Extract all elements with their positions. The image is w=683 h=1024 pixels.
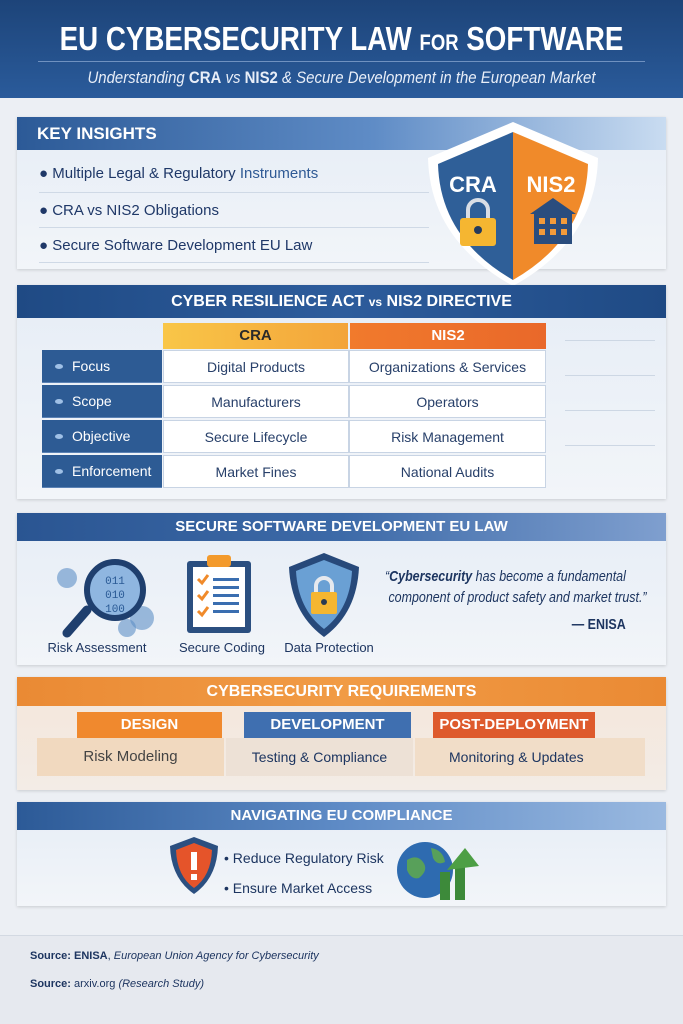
row: scope: Manufacturers: [211, 394, 301, 410]
heading: key insights: [17, 117, 666, 150]
icon: CRA NIS2 shield: [428, 122, 598, 285]
icon: shield lock: [289, 553, 359, 637]
row: enforcement: Enforcement: [72, 463, 151, 479]
label: secure coding: Secure Coding: [179, 640, 265, 655]
icon: magnifier: 010: [105, 590, 125, 602]
row: enforcement: [42, 455, 546, 488]
stage: development: Testing & Compliance: [252, 749, 387, 765]
heading: requirements: CYBERSECURITY REQUIREMENTS: [207, 683, 476, 700]
icon: magnifier: 100: [105, 604, 125, 616]
icon: globe with growth arrow: [397, 842, 479, 900]
panel: secure software development: [17, 513, 666, 665]
label: data protection: Data Protection: [284, 640, 374, 655]
heading: navigating: [17, 802, 666, 830]
row: focus: Focus: [72, 358, 110, 374]
icon: clipboard: [187, 555, 251, 633]
row: scope: Operators: [416, 394, 479, 410]
footer: sources: Source: ENISA, European Union Agency for Cybersecurity: [30, 950, 319, 962]
heading: key insights: KEY INSIGHTS: [37, 124, 157, 143]
compliance benefits list: • Reduce Regulatory Risk: [224, 850, 384, 866]
icon: CRA NIS2 shield: NIS2: [527, 172, 575, 197]
panel: cybersecurity requirements: [17, 677, 666, 790]
stage: design: Risk Modeling: [83, 748, 178, 765]
row: focus: Digital Products: [207, 359, 305, 375]
title: EU CYBERSECURITY LAW FOR SOFTWARE: [60, 20, 623, 57]
stage: design: [37, 712, 224, 776]
stage: post-deployment: [415, 712, 645, 776]
quote: component of product safety and market trust.”: [388, 589, 647, 606]
row: focus: Organizations & Services: [369, 359, 526, 375]
compliance benefits list: • Ensure Market Access: [224, 880, 372, 896]
row: focus: [42, 350, 546, 383]
stage: development: DEVELOPMENT: [270, 716, 385, 733]
column header: CRA: CRA: [239, 327, 272, 344]
row: objective: Objective: [72, 428, 130, 444]
row: enforcement: National Audits: [401, 464, 494, 480]
quote: “Cybersecurity has become a fundamental: [385, 568, 626, 585]
column header: NIS2: NIS2: [431, 327, 465, 344]
heading: comparison: CYBER RESILIENCE ACT vs NIS2 DIRECTIVE: [171, 293, 512, 310]
icon: CRA NIS2 shield: CRA: [449, 172, 497, 197]
header banner: [0, 0, 683, 98]
row: enforcement: Market Fines: [216, 464, 296, 480]
bullet list: ● Multiple Legal & Regulatory Instruments: [39, 165, 318, 182]
bullet list: ● Secure Software Development EU Law: [39, 237, 312, 254]
panel: navigating EU compliance: [17, 802, 666, 906]
column header: NIS2: [350, 323, 546, 349]
icon: magnifier: [57, 559, 154, 638]
footer: sources: Source: arxiv.org (Research Study): [30, 978, 204, 990]
row: objective: Risk Management: [391, 429, 504, 445]
row: scope: [42, 385, 546, 418]
footer: sources: [0, 935, 683, 1024]
quote: — ENISA: [572, 616, 626, 633]
row: objective: [42, 420, 546, 453]
stage: development: [226, 712, 413, 776]
heading: secure development: [17, 513, 666, 541]
stage: post-deployment: POST-DEPLOYMENT: [439, 716, 589, 733]
row: scope: Scope: [72, 393, 112, 409]
heading: secure development: SECURE SOFTWARE DEVELOPMENT EU LAW: [175, 518, 508, 535]
compliance benefits list: [224, 850, 384, 896]
stage: post-deployment: Monitoring & Updates: [449, 749, 584, 765]
icon: warning shield: [170, 837, 218, 894]
bullet list: ● CRA vs NIS2 Obligations: [39, 202, 219, 219]
label: risk assessment: Risk Assessment: [48, 640, 146, 655]
heading: requirements: [17, 677, 666, 706]
panel: key insights: [17, 117, 666, 269]
column header: CRA: [163, 323, 348, 349]
row: objective: Secure Lifecycle: [205, 429, 307, 445]
subtitle: Understanding CRA vs NIS2 & Secure Development in the European Market: [87, 68, 596, 87]
panel: CRA vs NIS2 comparison: [17, 285, 666, 499]
icon: magnifier: 011: [105, 576, 125, 588]
quote: [385, 568, 647, 633]
heading: navigating: NAVIGATING EU COMPLIANCE: [231, 807, 452, 824]
stage: design: DESIGN: [121, 716, 178, 733]
heading: comparison: [17, 285, 666, 318]
bullet list: [39, 165, 429, 263]
